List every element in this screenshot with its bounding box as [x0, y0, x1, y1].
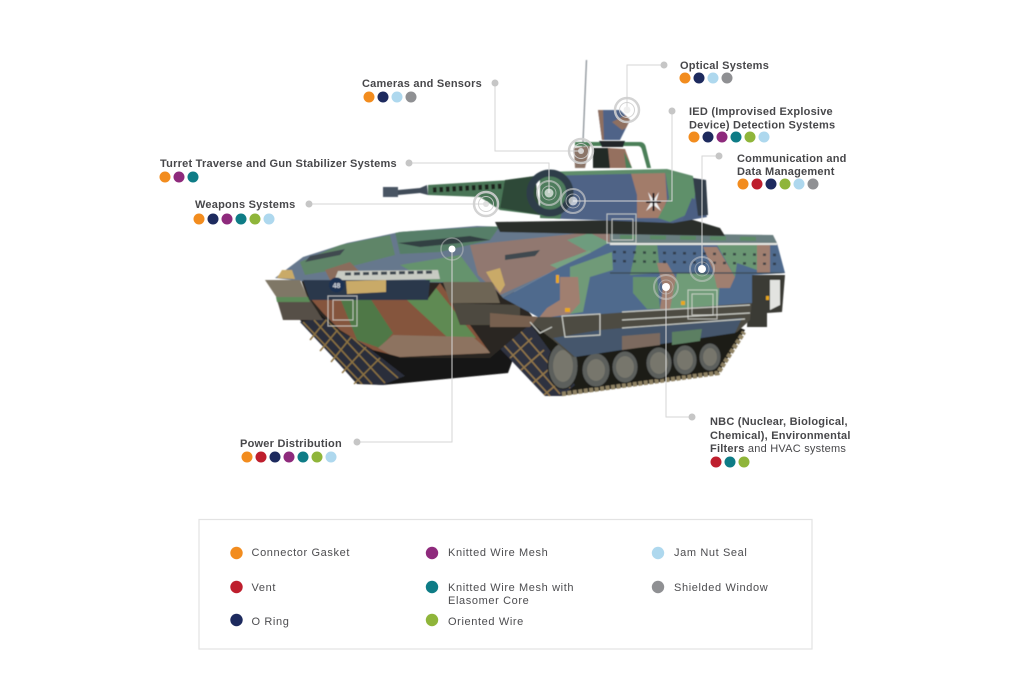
callout: NBC filters and HVAC systems: Chemical), Environmental [710, 430, 851, 442]
callout: IED Detection Systems: Device) Detection Systems [689, 120, 835, 132]
legend item: Vent [230, 581, 276, 594]
amber marker lights [556, 275, 769, 312]
legend item: Knitted Wire Mesh: Knitted Wire Mesh [448, 547, 548, 559]
callout: Weapons Systems [194, 199, 312, 224]
legend item: Connector Gasket: Connector Gasket [252, 547, 350, 559]
target markers [441, 98, 714, 299]
legend item: Knitted Wire Mesh with Elasomer Core: Knitted Wire Mesh with [448, 582, 574, 594]
callout: Communication and Data Management [716, 152, 847, 190]
legend item: Knitted Wire Mesh with Elasomer Core [426, 581, 574, 607]
legend item: Oriented Wire [426, 614, 524, 628]
hull side armour [503, 233, 785, 319]
antenna [582, 60, 586, 165]
legend item: Jam Nut Seal: Jam Nut Seal [674, 547, 747, 559]
legend item: Shielded Window: Shielded Window [674, 582, 768, 594]
callout: IED Detection Systems [668, 106, 835, 142]
callout: Communication and Data Management: Data Management [737, 166, 835, 178]
front flaps and stowage strip [265, 268, 520, 325]
legend item: O Ring: O Ring [252, 616, 289, 628]
legend item: Vent: Vent [252, 582, 276, 594]
callout: Power Distribution: Power Distribution [240, 438, 342, 450]
legend item: O Ring [230, 614, 289, 628]
roof sensor mast and roll bar [574, 108, 651, 168]
rear track and wheels [488, 310, 745, 396]
rear mechanical block [747, 275, 785, 327]
callout: Turret Traverse and Gun Stabilizer Systems: Turret Traverse and Gun Stabilizer Systems [160, 158, 397, 170]
turret base [495, 219, 725, 236]
callout: Weapons Systems: Weapons Systems [195, 199, 295, 211]
highlight squares [328, 214, 717, 326]
lower hull and skirts [490, 300, 752, 357]
callout: NBC filters and HVAC systems [688, 414, 851, 468]
callout: Optical Systems: Optical Systems [680, 60, 769, 72]
gun barrel [383, 176, 540, 215]
callout: NBC filters and HVAC systems: NBC (Nuclear, Biological, [710, 416, 848, 428]
turret [530, 169, 708, 223]
callout: Turret Traverse and Gun Stabilizer Systems [160, 158, 412, 182]
callout: Optical Systems [660, 60, 769, 84]
legend item: Oriented Wire: Oriented Wire [448, 616, 524, 628]
callout: IED Detection Systems: IED (Improvised Explosive [689, 106, 833, 118]
callout: NBC filters and HVAC systems: Filters and HVAC systems [710, 443, 846, 455]
front flaps and stowage strip: 48 [333, 283, 340, 290]
legend item: Knitted Wire Mesh with Elasomer Core: Elasomer Core [448, 595, 529, 607]
callout: Communication and Data Management: Communication and [737, 153, 847, 165]
lower front hull [310, 283, 495, 360]
callout: Cameras and Sensors: Cameras and Sensors [362, 78, 482, 90]
hull backing [300, 277, 535, 358]
vehicle illustration [265, 60, 785, 396]
front track [300, 300, 520, 385]
german cross emblem [646, 192, 661, 211]
leader lines [309, 65, 719, 442]
side rails [530, 305, 750, 337]
callout: Cameras and Sensors [362, 78, 498, 102]
deck and glacis [275, 226, 610, 298]
callout: Power Distribution [240, 438, 360, 462]
cradle ring [530, 173, 570, 213]
panel: legend [199, 520, 812, 649]
